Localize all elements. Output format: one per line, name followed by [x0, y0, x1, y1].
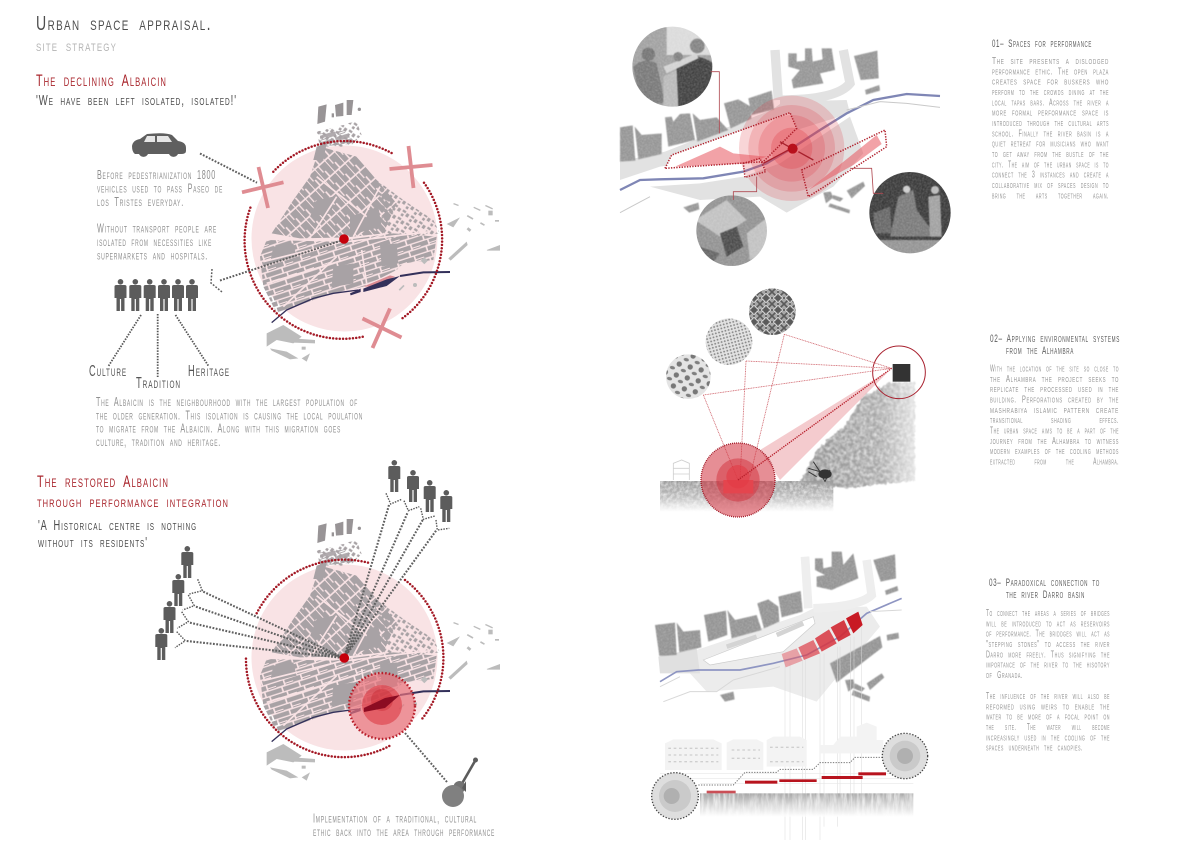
heading 03 — [989, 577, 1100, 601]
hillside — [800, 382, 915, 488]
panel: restored Albaicin map — [175, 493, 500, 781]
heading 01: 01– Spaces for performance — [992, 38, 1092, 50]
text block: 01 spaces for performance — [992, 38, 1109, 201]
dotted zone outlines — [665, 113, 887, 197]
dotted ring — [246, 560, 443, 757]
Alhambra block — [893, 364, 910, 382]
elevation: buildings — [665, 723, 883, 770]
body 01: The site presents a dislodged — [992, 56, 1109, 67]
guide lines — [785, 627, 862, 840]
body 02: replicate the processed used in the — [990, 384, 1119, 395]
quote: historical centre: without its residents' — [38, 535, 148, 551]
text block: pedestrianization: isolated from necessities like — [97, 234, 212, 249]
text block: implementation — [313, 810, 495, 839]
red performance areas — [675, 135, 882, 190]
body 02 — [990, 364, 1119, 468]
label: tradition: Tradition — [136, 375, 181, 392]
quote: historical centre — [38, 518, 197, 551]
dotted ring — [245, 141, 442, 339]
icon: row of six people — [114, 279, 198, 311]
text block: Albaicin population: to migrate from the Albaicin. Along with this migration goes — [96, 420, 341, 436]
icons: four people left — [155, 546, 193, 660]
subtitle: site strategy — [36, 38, 117, 55]
body 01 — [992, 56, 1109, 201]
leader lines to photos — [711, 72, 883, 200]
body 03: spaces underneath the canopies. — [986, 743, 1083, 754]
pattern: islamic screen two — [706, 318, 752, 365]
text block: pedestrianization: Without transport people are — [97, 220, 217, 236]
ground and streets — [658, 607, 880, 702]
text block: Albaicin population: the older generation. This isolation is causing the local poulation — [96, 408, 363, 422]
text block: Albaicin population: The Albaicin is the neighbourhood with the largest population of — [96, 394, 358, 409]
elevation: grey focus circle left — [652, 773, 698, 819]
heading 02: from the Alhambra — [1006, 345, 1074, 357]
sightlines — [703, 334, 892, 480]
ground and streets — [620, 100, 863, 213]
photo: river basin — [695, 195, 768, 267]
tree — [808, 462, 830, 482]
elevation: water and ground — [700, 793, 913, 817]
panel: Alhambra environmental section — [660, 288, 925, 517]
arrow: car to site — [200, 154, 257, 183]
body 03: of Granada. — [986, 670, 1023, 681]
arrow: people to centre — [211, 241, 340, 292]
brackets: residents — [175, 493, 449, 648]
text block: pedestrianization: vehicles used to pass Paseo de — [97, 180, 223, 196]
icon: guitar — [442, 758, 478, 807]
figure-ground map — [260, 100, 500, 362]
text block: pedestrianization: supermarkets and hospitals. — [97, 248, 208, 262]
text block: implementation: ethic back into the area through performance — [313, 824, 495, 839]
arrows: returning residents — [187, 505, 436, 658]
arrow: hotspot to guitar — [405, 733, 447, 782]
panel: declining Albaicin map — [242, 100, 500, 362]
centre marker — [788, 144, 798, 154]
photo: dancers — [868, 170, 952, 257]
concentric red zones — [739, 96, 844, 201]
elevation: grey focus circle right — [882, 733, 928, 779]
panel: river Darro bridges plan and elevation — [652, 552, 928, 840]
pink site circle — [252, 564, 438, 750]
large red circle — [701, 443, 775, 517]
pink site circle — [252, 146, 438, 332]
pattern: islamic screen three — [749, 288, 796, 335]
body 03: reformed using weirs to enable the — [986, 701, 1110, 712]
body 01: creates space for buskers who — [992, 77, 1109, 88]
label: culture: Culture — [89, 363, 127, 380]
river — [660, 598, 902, 702]
performance hotspot — [349, 673, 415, 739]
pattern: islamic screen one — [666, 354, 711, 399]
text block: pedestrianization — [97, 167, 223, 262]
body 02: mashrabiya islamic pattern create — [990, 405, 1119, 416]
label: heritage: Heritage — [188, 363, 230, 380]
title: Urban space appraisal. — [36, 13, 212, 35]
buildings — [655, 552, 899, 702]
heading 03: 03– Paradoxical connection to — [989, 577, 1100, 589]
ground — [660, 481, 833, 512]
buildings — [620, 48, 880, 213]
links between zones — [763, 142, 813, 163]
zoom circle — [873, 346, 925, 399]
text block: 03 river connection — [986, 577, 1110, 754]
body 01: more formal performance space is — [992, 108, 1109, 119]
photo: musicians — [632, 26, 712, 107]
red marker — [340, 653, 349, 663]
main sightline — [738, 368, 892, 480]
figure-ground map — [260, 519, 500, 781]
text block: pedestrianization: Before pedestrianization 1800 — [97, 167, 216, 182]
heading 03: the river Darro basin — [1006, 589, 1085, 601]
icons: four people top — [388, 460, 452, 522]
red marker — [339, 234, 349, 244]
red crosses — [242, 146, 432, 348]
panel: spaces for performance plan — [620, 25, 952, 267]
quote: historical centre: 'A Historical centre is nothing — [38, 518, 197, 534]
bridge: reservoirs of performance — [782, 612, 863, 667]
heading: the restored Albaicin — [37, 472, 229, 511]
elevation: red bridges — [707, 772, 886, 793]
body 01: performance ethic. The open plaza — [992, 66, 1109, 77]
body 02: the Alhambra the project seeks to — [990, 374, 1119, 385]
heading: the restored Albaicin: through performance integration — [37, 494, 229, 511]
heading: the declining Albaicin: The declining Albaicin — [36, 71, 167, 90]
icon: car — [132, 133, 186, 157]
heading 02 — [990, 333, 1120, 357]
river — [620, 94, 940, 190]
view cone — [760, 369, 891, 480]
elevation: dotted circulation — [698, 757, 903, 785]
body 03 — [986, 608, 1110, 754]
body 01: school. Finally the river basin is a — [992, 128, 1109, 139]
text block: 02 environmental systems — [990, 333, 1120, 468]
text block: pedestrianization: los Tristes everyday. — [97, 194, 184, 209]
quote: isolated: 'We have been left isolated, isolated!' — [36, 93, 237, 109]
heading: the restored Albaicin: The restored Albaicin — [37, 472, 169, 491]
arrows: people to values — [108, 314, 208, 377]
text block: Albaicin population: culture, tradition and heritage. — [96, 434, 221, 449]
small building elevation — [673, 460, 689, 480]
text block: Albaicin population — [96, 394, 363, 449]
text block: implementation: Implementation of a traditional, cultural — [313, 810, 477, 826]
